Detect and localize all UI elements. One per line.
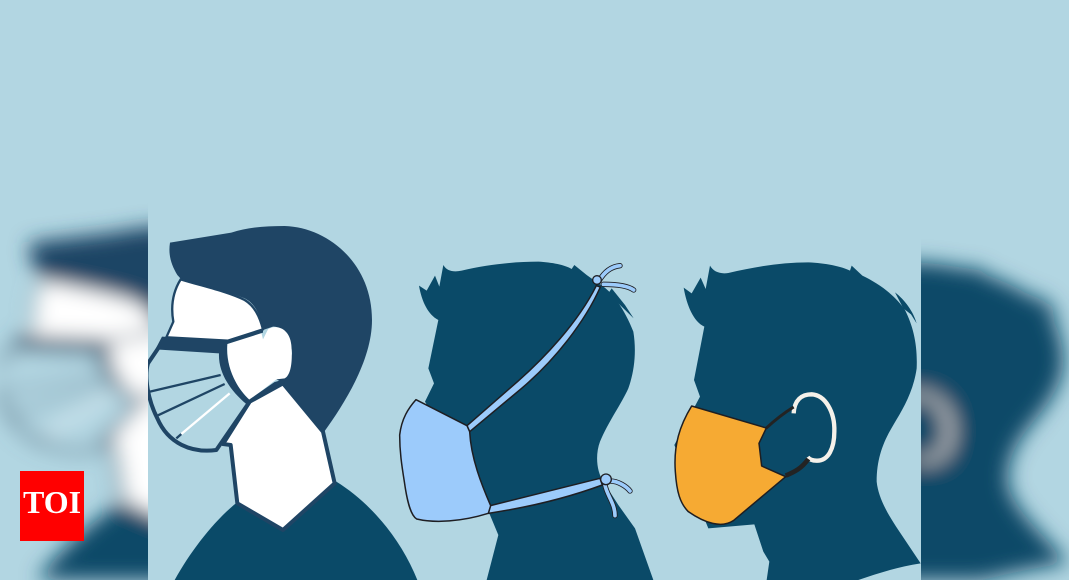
hair wisps <box>895 292 917 323</box>
head silhouette <box>674 262 921 580</box>
bottom knot <box>601 474 630 516</box>
cheek and ear <box>227 327 292 400</box>
neck <box>223 383 335 530</box>
jaw line <box>250 381 284 402</box>
TOI logo: TOI <box>23 484 81 520</box>
figure: man with blue tie mask <box>400 262 653 580</box>
black strap <box>766 407 794 428</box>
blue cloth mask with straps <box>400 286 602 521</box>
centre panel background <box>148 0 921 580</box>
figure: man with orange ear-loop mask <box>674 262 921 580</box>
head silhouette <box>419 262 653 580</box>
hair <box>169 226 372 432</box>
hair wisps <box>608 288 634 318</box>
ear loop <box>794 394 834 461</box>
blurred background copy of the figures <box>0 226 1069 580</box>
three profile figures wearing masks <box>146 226 921 580</box>
surgical mask <box>146 328 263 451</box>
figure: man with surgical mask <box>146 226 417 580</box>
top knot <box>593 266 634 290</box>
TOI logo <box>20 471 84 541</box>
forehead and nose <box>166 279 263 341</box>
orange mask <box>675 406 786 524</box>
shoulders <box>175 482 417 580</box>
